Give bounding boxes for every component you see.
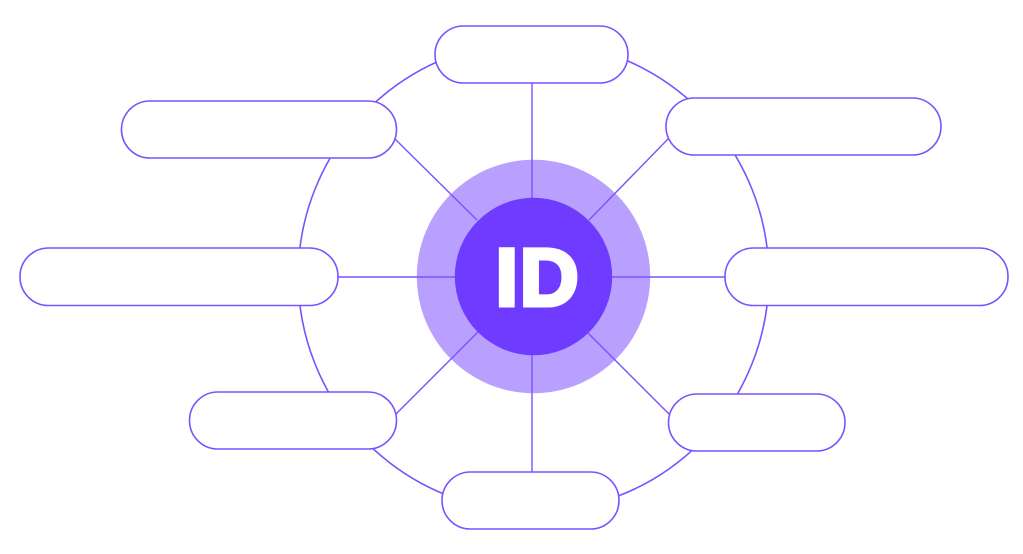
pill: lower right <box>668 394 845 451</box>
pill: top <box>435 26 628 83</box>
pill: middle right <box>725 248 1008 306</box>
pill: middle left <box>20 248 338 306</box>
outer connecting ring <box>298 41 769 512</box>
pill: upper right <box>666 98 941 155</box>
pill: bottom <box>442 472 619 529</box>
central halo <box>417 160 650 393</box>
pill: upper left <box>122 101 396 158</box>
central ID badge <box>455 198 612 355</box>
ID label: I <box>495 232 518 324</box>
pill: lower left <box>190 392 396 449</box>
ID label: D <box>520 232 579 324</box>
spokes <box>338 83 725 472</box>
